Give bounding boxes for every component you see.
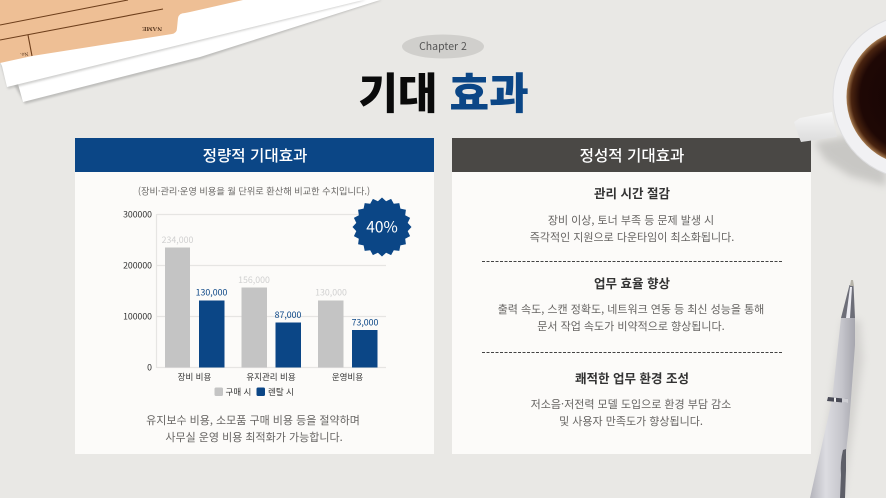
bars: equipment cost: 130,000: [196, 286, 227, 298]
pen: [810, 280, 863, 498]
folder ruled lines: [0, 0, 163, 56]
panel body: [75, 138, 434, 454]
item: work environment: [531, 368, 731, 429]
y axis labels: 300000: [123, 208, 152, 220]
chapter pill: [402, 34, 484, 58]
item: management time: 장비 이상, 토너 부족 등 문제 발생 시: [548, 212, 714, 228]
item: management time: [530, 183, 734, 245]
y axis labels: [123, 208, 152, 374]
pen ring: [827, 397, 848, 403]
badge: 40%: [352, 198, 412, 256]
panel heading: 정량적 기대효과: [203, 144, 307, 166]
chart summary: 유지보수 비용, 소모품 구매 비용 등을 절약하며: [146, 412, 360, 428]
pen tip: [841, 285, 855, 318]
badge: 40%: 40%: [366, 216, 398, 238]
bar chart: [123, 208, 386, 398]
item: work efficiency: 업무 효율 향상: [594, 273, 670, 292]
bars: operating cost: 73,000: [352, 316, 379, 328]
legend: 렌탈 시: [268, 386, 294, 398]
item: work environment: 저소음·저전력 모델 도입으로 환경 부담 감소: [531, 396, 731, 412]
item: management time: 즉각적인 지원으로 다운타임이 최소화됩니다.: [530, 229, 734, 245]
coffee cup: [794, 15, 886, 186]
item: work efficiency: 문서 작업 속도가 비약적으로 향상됩니다.: [537, 318, 725, 334]
panel heading: [452, 138, 811, 172]
folder label: name: NAME: [142, 25, 162, 32]
coffee: [846, 28, 886, 166]
y axis labels: 0: [147, 360, 152, 374]
cup rim: [833, 15, 886, 179]
pen body: [810, 318, 855, 498]
item: work efficiency: 출력 속도, 스캔 정확도, 네트워크 연동 등 최신 성능을 통해: [498, 301, 764, 317]
item: work environment: 쾌적한 업무 환경 조성: [575, 368, 689, 387]
bars: operating cost: 130,000: [315, 286, 347, 298]
item: management time: 관리 시간 절감: [594, 183, 670, 202]
y axis labels: 100000: [123, 310, 152, 322]
panel: qualitative effects: [452, 138, 811, 454]
bars: maintenance cost: 156,000: [238, 273, 270, 286]
bars: maintenance cost: 유지관리 비용: [246, 371, 296, 383]
bars: equipment cost: 장비 비용: [178, 371, 212, 383]
pen clip: [840, 449, 846, 498]
bars: maintenance cost: [238, 273, 302, 383]
chart summary: 사무실 운영 비용 최적화가 가능합니다.: [165, 429, 343, 445]
bars: equipment cost: 234,000: [162, 233, 193, 246]
bars: equipment cost: [162, 233, 227, 383]
paper stack and folder: [0, 0, 382, 104]
chapter pill: Chapter 2: [419, 39, 467, 54]
panel heading: 정성적 기대효과: [580, 144, 684, 166]
bars: maintenance cost: 87,000: [275, 308, 302, 321]
legend: [214, 386, 294, 398]
item: work environment: 및 사용자 만족도가 향상됩니다.: [559, 413, 703, 429]
folder label: number: No.: [19, 50, 29, 57]
cup handle: [794, 112, 837, 142]
bars: operating cost: 운영비용: [332, 371, 363, 383]
grid lines: [156, 214, 386, 368]
panel: quantitative effects: [75, 138, 434, 454]
bars: operating cost: [315, 286, 379, 383]
legend: 구매 시: [226, 386, 251, 398]
panel body: [452, 138, 811, 454]
chart summary: [146, 412, 360, 445]
item: work efficiency: [498, 273, 764, 334]
y axis labels: 200000: [123, 258, 152, 272]
chart note: (장비·관리·운영 비용을 월 단위로 환산해 비교한 수치입니다.): [138, 184, 370, 198]
title: 기대 효과: [358, 60, 529, 122]
panel heading: [75, 138, 434, 172]
